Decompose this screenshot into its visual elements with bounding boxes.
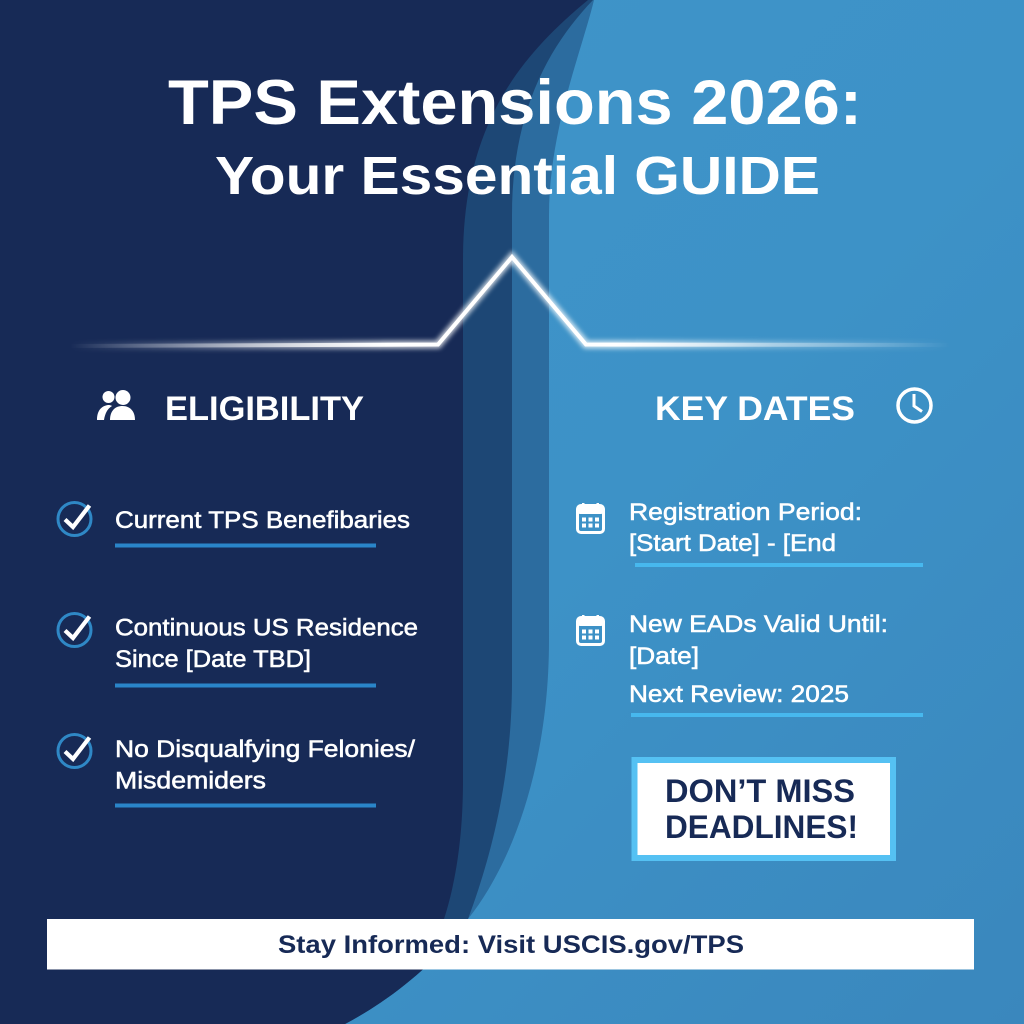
eligibility item 3: Misdemiders	[115, 768, 266, 794]
callout: don't miss deadlines: DON’T MISS	[665, 773, 855, 809]
key date: EADs and next review: Next Review: 2025	[629, 681, 849, 708]
heading: key dates with clock icon: KEY DATES	[655, 390, 855, 428]
footer banner	[47, 919, 974, 970]
icon: people	[97, 390, 135, 420]
callout: don't miss deadlines: DEADLINES!	[665, 809, 858, 845]
key date: registration period: Registration Period:	[629, 499, 862, 526]
background: dark blue curved band	[0, 0, 593, 1024]
eligibility item 2: Since [Date TBD]	[115, 646, 311, 673]
background: mid blue curved band	[0, 0, 594, 1024]
icon: check	[58, 614, 91, 646]
title: TPS Extensions 2026:	[168, 68, 862, 138]
icon: check	[58, 502, 91, 536]
icon: calendar	[577, 615, 604, 644]
title	[168, 68, 862, 206]
key date: EADs and next review	[577, 611, 923, 717]
eligibility item 3: No Disqualfying Felonies/	[115, 736, 415, 763]
glowing peak line	[70, 257, 950, 346]
key date: registration period	[577, 499, 923, 567]
key date: EADs and next review: [Date]	[629, 643, 699, 670]
eligibility item 2	[58, 614, 418, 688]
heading: eligibility with people icon: ELIGIBILITY	[165, 390, 364, 428]
title: Your Essential GUIDE	[215, 146, 820, 206]
eligibility item 3	[58, 734, 415, 808]
icon: calendar	[577, 503, 604, 532]
heading: key dates with clock icon	[655, 389, 931, 428]
icon: clock	[898, 389, 931, 422]
background: navy panel	[0, 0, 588, 1024]
key date: registration period: [Start Date] - [End	[629, 530, 836, 557]
icon: check	[58, 734, 91, 768]
eligibility item 1	[58, 502, 410, 548]
eligibility item 2: Continuous US Residence	[115, 614, 418, 642]
footer banner: Stay Informed: Visit USCIS.gov/TPS	[278, 931, 744, 959]
key date: EADs and next review: New EADs Valid Until:	[629, 611, 888, 638]
callout: don't miss deadlines	[634, 760, 893, 858]
eligibility item 1: Current TPS Benefibaries	[115, 507, 410, 534]
